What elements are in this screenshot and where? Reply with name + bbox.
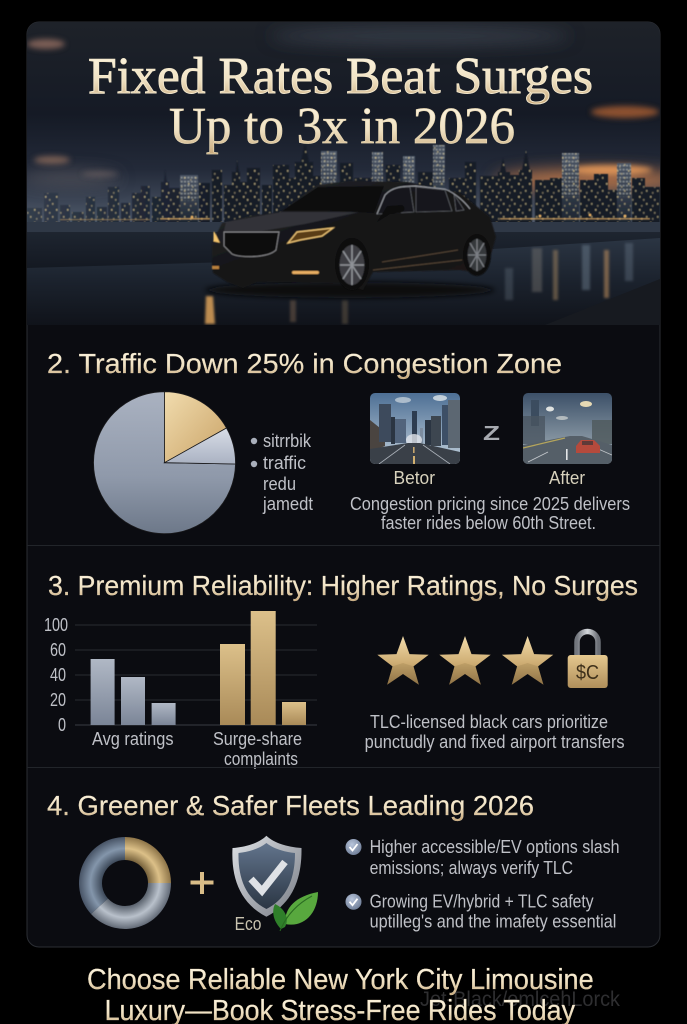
hero panel <box>20 22 685 325</box>
star three <box>502 636 553 685</box>
three gold stars <box>377 636 553 685</box>
bar chart: 0 <box>58 715 66 735</box>
congestion pricing text: faster rides below 60th Street. <box>381 513 596 533</box>
footer call to action: Choose Reliable New York City Limousine <box>87 964 594 996</box>
hero title <box>88 48 593 155</box>
bar chart: 100 <box>44 615 68 635</box>
pie legend: traffic <box>263 453 306 473</box>
licensed black cars text: TLC-licensed black cars prioritize <box>370 712 608 732</box>
front wheel <box>335 238 369 290</box>
pie legend: jamedt <box>262 494 313 514</box>
waterfront wall and wet road <box>27 222 660 325</box>
grille <box>224 232 279 257</box>
after street photo <box>523 393 612 464</box>
leaf <box>273 892 318 931</box>
photo captions: Betor <box>394 468 435 488</box>
pie legend <box>251 431 313 514</box>
bullet two: Growing EV/hybrid + TLC safety <box>370 892 594 912</box>
photo captions <box>394 468 585 488</box>
night sky with clouds and sunset glow <box>20 22 685 227</box>
plus sign <box>190 872 214 894</box>
bullet one: Higher accessible/EV options slash <box>370 837 620 857</box>
section 2 heading: 2. Traffic Down 25% in Congestion Zone <box>47 348 562 379</box>
photo captions: After <box>549 468 585 488</box>
city skyline <box>27 143 660 224</box>
star one <box>377 636 429 685</box>
donut chart <box>79 837 171 929</box>
bullet two <box>346 892 616 932</box>
bar chart: 40 <box>50 665 66 685</box>
congestion pricing text: Congestion pricing since 2025 delivers <box>350 494 630 514</box>
rear wheel <box>463 234 491 276</box>
eco label: Eco <box>235 914 261 934</box>
section 3 heading: 3. Premium Reliability: Higher Ratings, No Surges <box>48 570 638 601</box>
side windows <box>377 187 464 214</box>
pie chart <box>94 392 236 534</box>
mirror <box>377 205 404 222</box>
body side crease <box>373 250 462 270</box>
horizon city lights <box>60 214 650 220</box>
padlock icon <box>568 632 608 688</box>
padlock icon: $C <box>576 662 599 684</box>
licensed black cars text: punctudly and fixed airport transfers <box>365 732 625 752</box>
congestion pricing text <box>350 494 630 533</box>
bullet one <box>346 837 620 878</box>
section 3: reliability <box>44 570 638 769</box>
licensed black cars text <box>365 712 625 752</box>
bar chart <box>44 611 317 769</box>
chrome roof trim <box>377 186 470 214</box>
hero title: Up to 3x in 2026 <box>169 98 515 155</box>
pie legend: redu <box>263 474 296 494</box>
hood highlight <box>224 212 360 231</box>
section 4 heading: 4. Greener & Safer Fleets Leading 2026 <box>47 790 534 821</box>
black limousine <box>212 181 496 290</box>
arrow glyph between photos: Z <box>483 423 500 445</box>
pie legend: sitrrbik <box>263 431 312 451</box>
headlights <box>212 228 333 274</box>
hero title: Fixed Rates Beat Surges <box>88 48 593 105</box>
faint watermark: Jet-Black/emlcehLorck <box>420 988 620 1011</box>
windshield <box>282 186 384 213</box>
bar chart: complaints <box>224 749 298 769</box>
bar chart: 60 <box>50 640 66 660</box>
bar chart: 20 <box>50 690 66 710</box>
section 4: greener fleets <box>47 790 620 934</box>
bar chart: Avg ratings <box>92 729 174 749</box>
bullet two: uptilleg's and the imafety essential <box>370 912 616 932</box>
car body <box>212 181 496 290</box>
star two <box>439 636 491 685</box>
footer call to action <box>87 964 594 1024</box>
bar chart: Surge-share <box>213 729 302 749</box>
shield with check <box>232 836 302 917</box>
section 2: traffic <box>47 348 630 534</box>
bullet one: emissions; always verify TLC <box>370 858 573 878</box>
before street photo <box>370 393 460 464</box>
